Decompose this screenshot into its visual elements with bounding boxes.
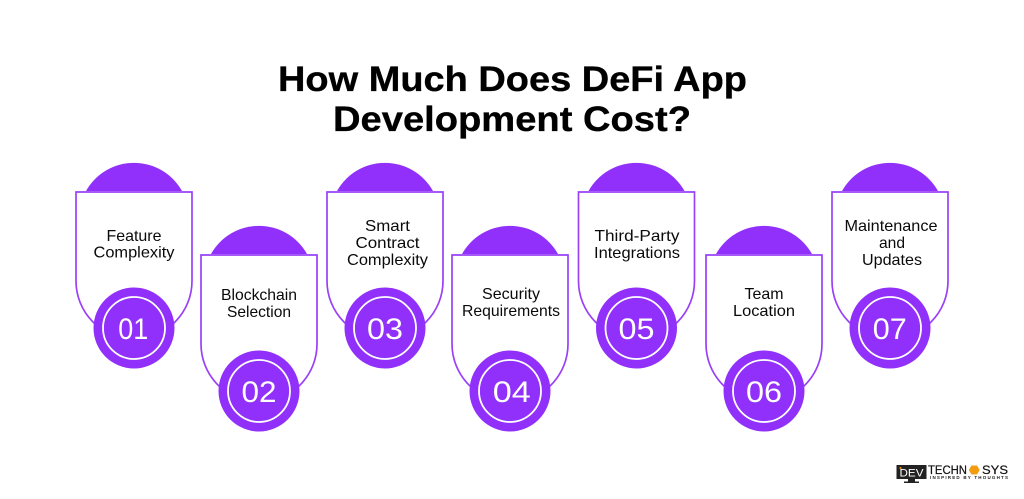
card 01: Feature Complexity: Feature (106, 228, 162, 245)
logo wordmark end: SYS (982, 465, 1008, 477)
card 06: Team Location: Location (733, 303, 795, 320)
title: How Much Does DeFi App (278, 60, 747, 99)
card 07: Maintenance and Updates: 07 (873, 313, 907, 346)
card 07: Maintenance and Updates (832, 163, 948, 368)
card 07: Maintenance and Updates: and (879, 235, 905, 252)
logo: Dev Technosys (896, 465, 1008, 483)
card 07: Maintenance and Updates: Maintenance (844, 218, 938, 235)
logo wordmark: TECHN (928, 465, 967, 477)
card 03: Smart Contract Complexity (327, 163, 443, 368)
card 03: Smart Contract Complexity: Complexity (347, 252, 428, 269)
icon: monitor: DEV (900, 468, 924, 480)
card 02: Blockchain Selection: Blockchain (221, 287, 297, 304)
card 02: Blockchain Selection: 02 (242, 376, 276, 409)
card 07: Maintenance and Updates: Updates (862, 252, 922, 269)
card 01: Feature Complexity: 01 (118, 313, 148, 346)
card 06: Team Location: 06 (746, 376, 782, 409)
card 04: Security Requirements: Security (482, 286, 540, 303)
title (278, 60, 747, 139)
card 03: Smart Contract Complexity: Contract (356, 235, 420, 252)
card 04: Security Requirements: Requirements (462, 303, 560, 320)
card 03: Smart Contract Complexity: Smart (365, 218, 411, 235)
card 05: Third-Party Integrations: 05 (618, 313, 654, 346)
card 01: Feature Complexity: Complexity (94, 244, 174, 262)
card 04: Security Requirements (452, 226, 568, 432)
icon: hexagon (969, 466, 980, 474)
card 05: Third-Party Integrations (578, 163, 694, 368)
card 06: Team Location: Team (744, 286, 784, 303)
card 05: Third-Party Integrations: Third-Party (594, 228, 680, 245)
card 05: Third-Party Integrations: Integrations (594, 245, 680, 262)
card 01: Feature Complexity (76, 163, 192, 368)
card 02: Blockchain Selection (201, 226, 317, 432)
card 03: Smart Contract Complexity: 03 (367, 313, 403, 346)
logo tagline: INSPIRED BY THOUGHTS (930, 475, 1008, 480)
title: Development Cost? (333, 100, 691, 139)
card 06: Team Location (706, 226, 822, 432)
card 02: Blockchain Selection: Selection (227, 304, 291, 321)
card 04: Security Requirements: 04 (493, 376, 531, 409)
